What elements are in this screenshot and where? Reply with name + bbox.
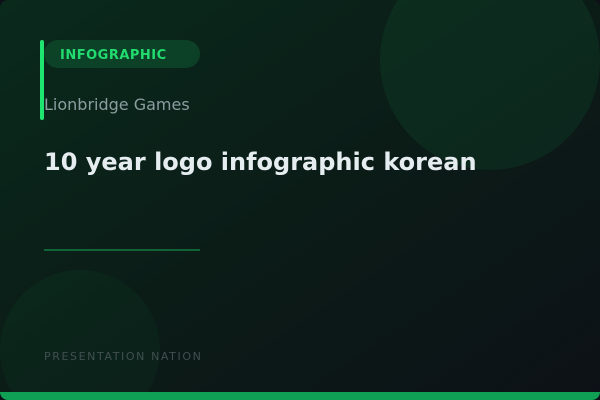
decorative circle: bottom left bbox=[0, 270, 160, 400]
badge label: INFOGRAPHIC bbox=[60, 48, 167, 63]
bottom accent bar bbox=[0, 392, 600, 400]
decorative circle: top right bbox=[380, 0, 600, 170]
subtitle: Lionbridge Games bbox=[44, 95, 190, 114]
left accent bar bbox=[40, 40, 44, 120]
divider bbox=[44, 249, 200, 251]
title: 10 year logo infographic korean bbox=[44, 148, 477, 176]
footer text: PRESENTATION NATION bbox=[44, 350, 202, 363]
category badge bbox=[44, 40, 200, 68]
